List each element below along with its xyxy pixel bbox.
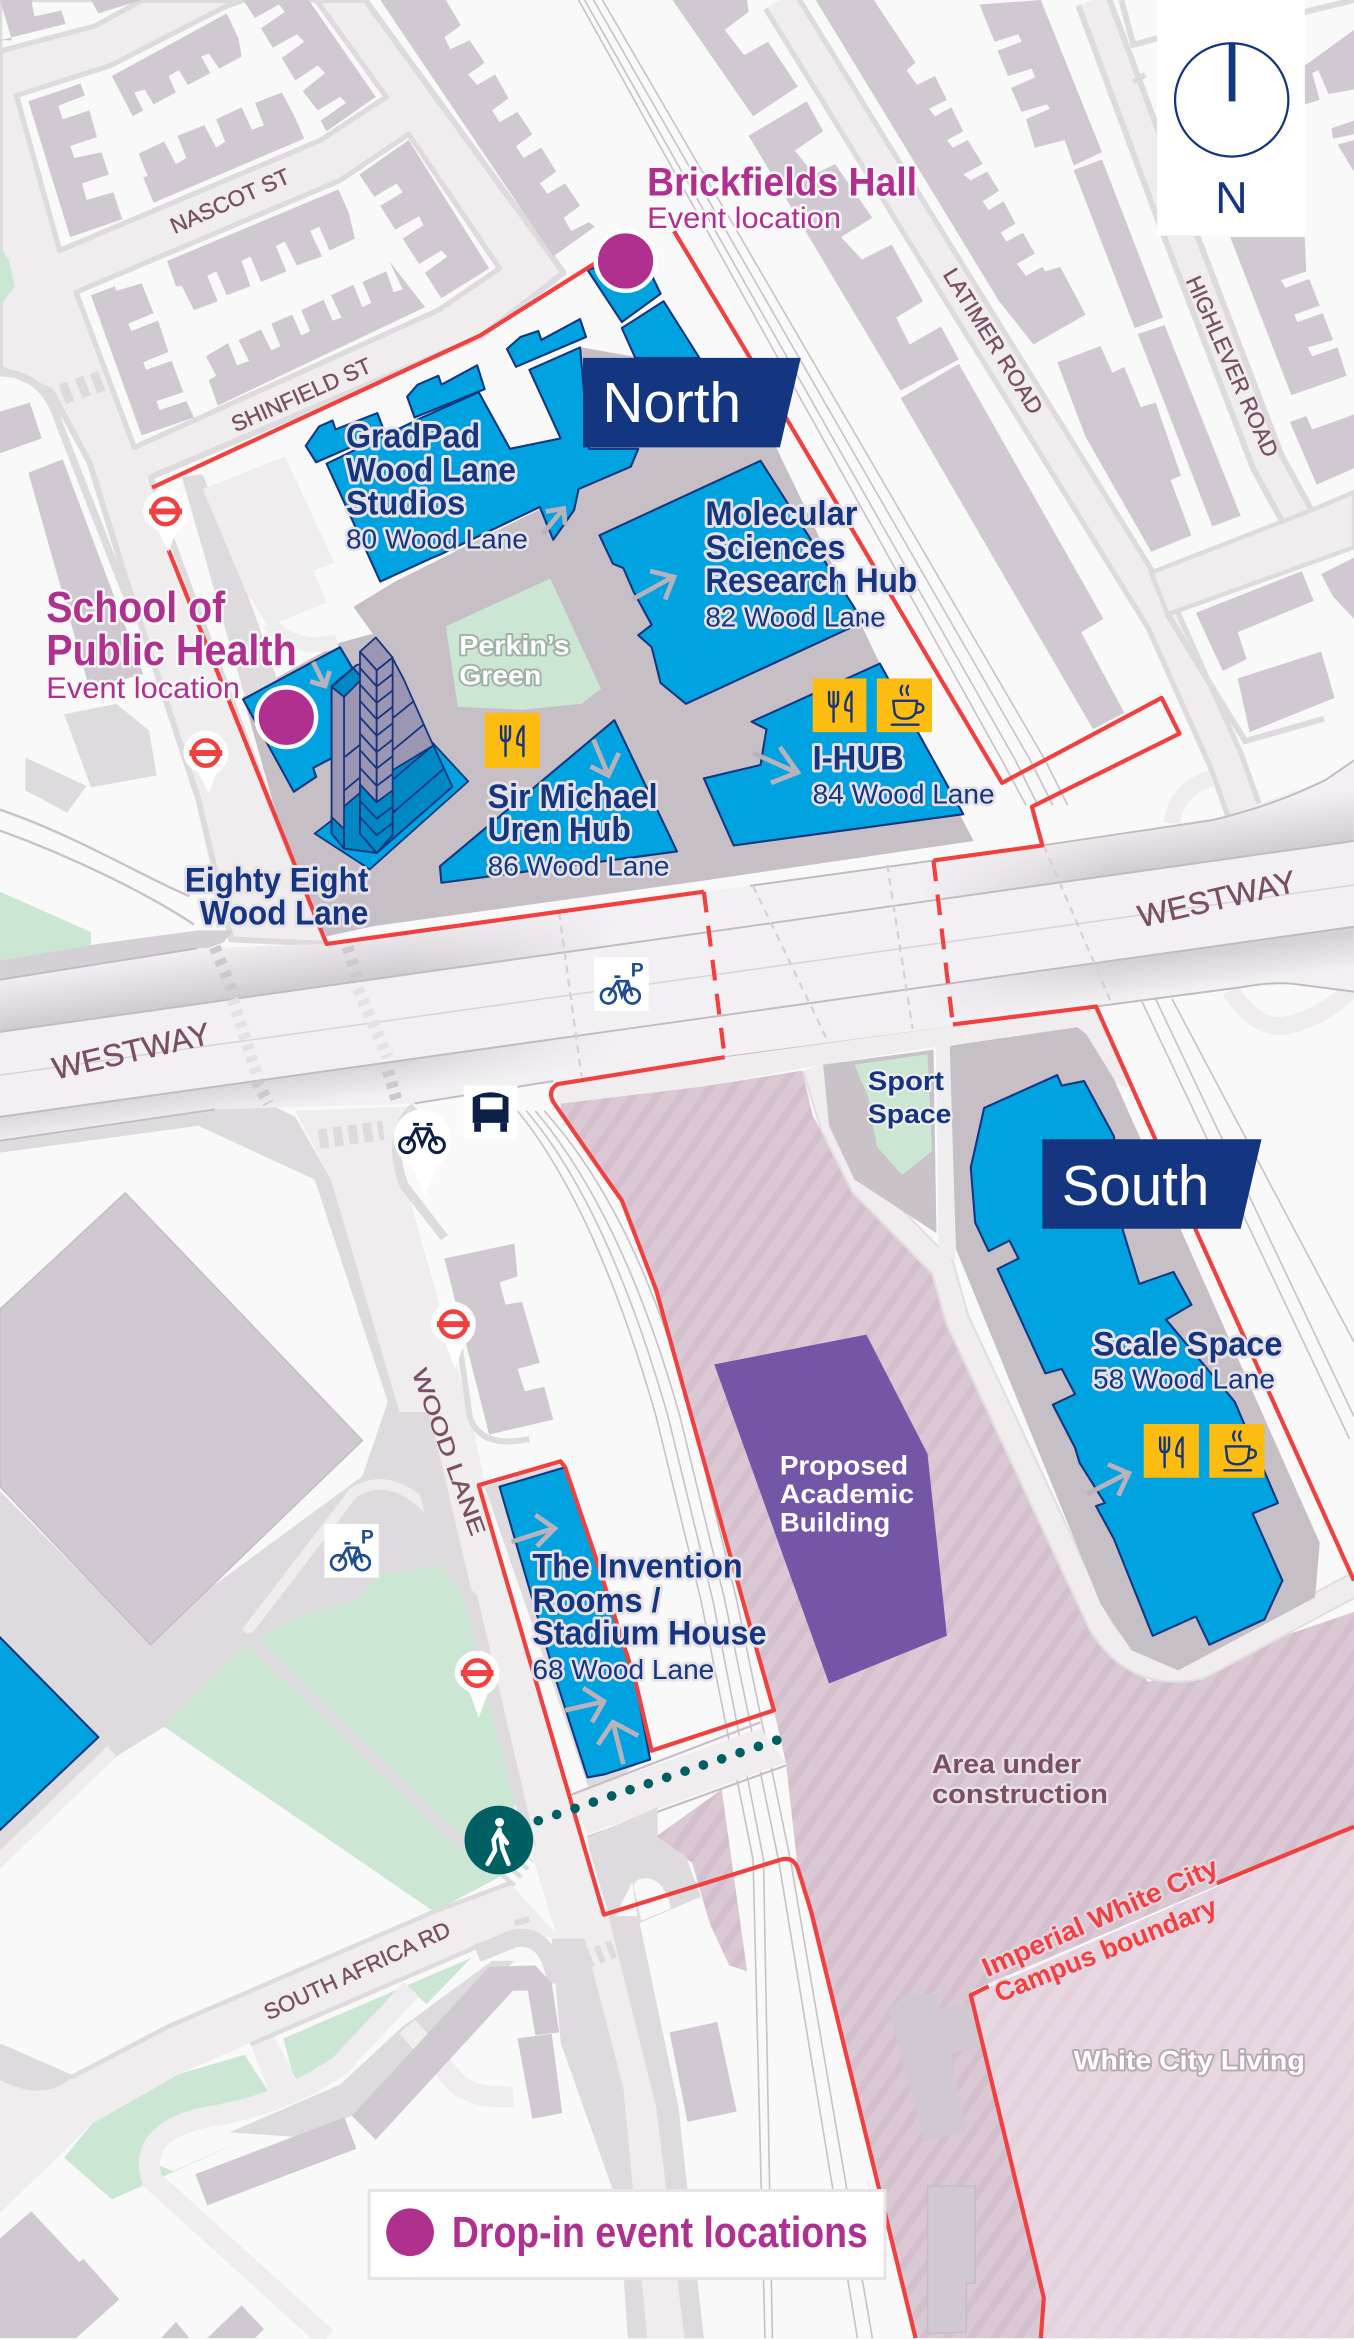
- label: Imperial White City Campus boundary: Imperial White City: [977, 1852, 1223, 1983]
- label: I-HUB: I-HUB: [813, 739, 904, 777]
- Perkin's Green lawn: [446, 579, 601, 710]
- icon: coffee: [877, 678, 932, 732]
- icon: event marker Brickfields Hall: [596, 231, 655, 291]
- street labels: SOUTH AFRICA RD: [260, 1917, 454, 2025]
- legend: drop-in event locations: [369, 2190, 885, 2278]
- sport space ground: [823, 1050, 936, 1233]
- label: Eighty Eight Wood Lane: Eighty Eight: [185, 862, 368, 900]
- north-west street network: [0, 0, 564, 944]
- label: Eighty Eight Wood Lane: [185, 862, 368, 933]
- buildings south-west: [0, 1965, 737, 2338]
- strip beneath Westway: [555, 1007, 1133, 1103]
- label: The Invention Rooms: Rooms /: [532, 1582, 661, 1620]
- icon: underground marker: [455, 1651, 500, 1718]
- building: Brickfields Hall: [588, 253, 699, 358]
- label: Perkin's Green: Green: [459, 660, 541, 690]
- panel: North label: [583, 358, 801, 447]
- label: Sir Michael Uren Hub: Uren Hub: [488, 811, 631, 849]
- icon: underground marker: [183, 731, 228, 793]
- label: Proposed Academic Building: [780, 1451, 914, 1537]
- road: Wood Lane: [295, 1106, 704, 2338]
- street labels: HIGHLEVER ROAD: [1181, 272, 1283, 461]
- label: Scale Space: Scale Space: [1093, 1325, 1282, 1363]
- north site ground: [243, 347, 974, 936]
- area under construction hatch: [561, 1071, 1354, 2338]
- label: Molecular Sciences Research Hub: Sciences: [705, 529, 845, 567]
- building: Hammersmith side blue block: [0, 1633, 98, 1834]
- label: GradPad: Studios: [346, 484, 465, 522]
- label: Molecular Sciences Research Hub: Molecular: [705, 495, 857, 533]
- label: Sport Space: Sport: [868, 1066, 944, 1096]
- label: Proposed Academic Building: Academic: [780, 1479, 914, 1509]
- building: School of Public Health: [243, 647, 377, 792]
- building: GradPad and Wood Lane Studios: [306, 319, 638, 582]
- green space north-west: [0, 892, 91, 960]
- icon: cycle parking: [594, 957, 649, 1011]
- label: Perkin's Green: [459, 631, 570, 690]
- building: Molecular Sciences Research Hub: [599, 461, 863, 704]
- label: Scale Space: 58 Wood Lane: [1093, 1363, 1275, 1394]
- street labels: [49, 164, 1299, 2025]
- building: Scale Space: [971, 1075, 1282, 1645]
- label: Molecular Sciences Research Hub: Research Hub: [705, 562, 917, 600]
- label: Area under construction: [932, 1749, 1108, 1809]
- lanes beside south site: [814, 1036, 1354, 1670]
- label: Sir Michael Uren Hub: [488, 778, 670, 881]
- label: Area under construction: construction: [932, 1779, 1108, 1809]
- label: GradPad: Wood Lane: [346, 452, 516, 490]
- building: Eighty Eight Wood Lane tower: [315, 637, 468, 869]
- label: The Invention Rooms: [532, 1548, 766, 1685]
- road: Westway: [0, 760, 1354, 1141]
- icon: walking route start: [465, 1806, 533, 1874]
- icon: event marker School of Public Health: [256, 687, 316, 747]
- label: The Invention Rooms: 68 Wood Lane: [532, 1654, 714, 1685]
- white forecourt north-west: [182, 456, 337, 701]
- icon: food: [485, 713, 540, 768]
- icon: cycle parking: [324, 1524, 379, 1578]
- icon: bus stop: [464, 1086, 517, 1139]
- walking route dots: [538, 1740, 777, 1821]
- street labels: WOOD LANE: [407, 1365, 491, 1539]
- icon: underground marker: [143, 489, 188, 552]
- road: South Africa Rd: [0, 1566, 617, 2338]
- heading: Brickfields Hall: Event location: [647, 202, 841, 235]
- white strip along site edge: [377, 887, 699, 932]
- heading: School of Public Health: Public Health: [46, 627, 297, 675]
- westway side ramps: [0, 778, 1354, 1026]
- icon: cycle parking: P: [631, 960, 644, 982]
- label: White City Living: White City Living: [1074, 2046, 1305, 2076]
- label: GradPad: GradPad: [346, 417, 480, 455]
- label: Scale Space: [1093, 1325, 1282, 1394]
- heading: School of Public Health: [46, 584, 297, 705]
- railway south: [517, 1111, 872, 2338]
- icon: food: [1144, 1424, 1199, 1478]
- heading: Brickfields Hall: Brickfields Hall: [647, 159, 917, 204]
- terraced buildings: north-west blocks: [0, 0, 595, 813]
- icon: underground marker: [431, 1302, 476, 1369]
- arrows: [310, 508, 1129, 1764]
- label: GradPad: [346, 417, 528, 555]
- icon: cycle hire marker: [394, 1109, 450, 1196]
- label: I-HUB: 84 Wood Lane: [813, 779, 995, 810]
- label: Molecular Sciences Research Hub: 82 Wood Lane: [705, 601, 886, 632]
- label: Sport Space: [868, 1066, 951, 1129]
- road area west of Wood Lane with grey site: [0, 1103, 447, 1868]
- street labels: NASCOT ST: [166, 164, 294, 239]
- label: Imperial White City Campus boundary: Campus boundary: [990, 1892, 1221, 2008]
- label: Sir Michael Uren Hub: Sir Michael: [488, 778, 658, 816]
- heading: School of Public Health: School of: [46, 584, 226, 632]
- label: I-HUB: [813, 739, 995, 810]
- panel: compass: [1157, 0, 1305, 236]
- north-east streets: [780, 0, 1354, 835]
- panel: North label: North: [602, 372, 741, 435]
- street labels: WESTWAY: [49, 1016, 214, 1086]
- street labels: LATIMER ROAD: [938, 264, 1048, 419]
- label: Perkin's Green: Perkin’s: [459, 631, 570, 661]
- legend: drop-in event locations: Drop-in event locations: [452, 2209, 868, 2257]
- heading: School of Public Health: Event location: [46, 672, 240, 705]
- label: Eighty Eight Wood Lane: Wood Lane: [200, 895, 368, 933]
- proposed academic building: [714, 1335, 947, 1683]
- south site ground: [953, 1030, 1317, 1667]
- white city living zone: [971, 1827, 1354, 2338]
- label: Molecular Sciences Research Hub: [705, 495, 917, 632]
- building: The Invention Rooms / Stadium House: [485, 1464, 652, 1789]
- heading: Brickfields Hall: [647, 159, 917, 235]
- label: The Invention Rooms: The Invention: [532, 1548, 743, 1586]
- railway north: [579, 0, 1354, 1439]
- icon: food: [813, 678, 866, 732]
- label: Proposed Academic Building: Building: [780, 1507, 890, 1537]
- panel: South label: South: [1062, 1155, 1209, 1218]
- street labels: WESTWAY: [1134, 864, 1299, 934]
- label: GradPad: 80 Wood Lane: [346, 524, 528, 555]
- footbridge: [570, 1722, 786, 1924]
- panel: South label: [1042, 1139, 1262, 1229]
- street labels: SHINFIELD ST: [227, 353, 376, 437]
- icon: coffee: [1209, 1424, 1265, 1478]
- label: Sport Space: Space: [868, 1099, 951, 1129]
- panel: compass: N: [1215, 174, 1248, 223]
- red campus boundaries: [152, 231, 1354, 2338]
- building: Sir Michael Uren Hub: [440, 720, 677, 883]
- label: The Invention Rooms: Stadium House: [532, 1615, 766, 1653]
- label: Proposed Academic Building: Proposed: [780, 1451, 908, 1481]
- icon: cycle parking: P: [361, 1526, 374, 1548]
- terraced buildings: north-east blocks: [673, 0, 1354, 732]
- label: Sir Michael Uren Hub: 86 Wood Lane: [488, 850, 670, 881]
- label: Area under construction: Area under: [932, 1749, 1082, 1779]
- building: I-HUB: [704, 664, 963, 845]
